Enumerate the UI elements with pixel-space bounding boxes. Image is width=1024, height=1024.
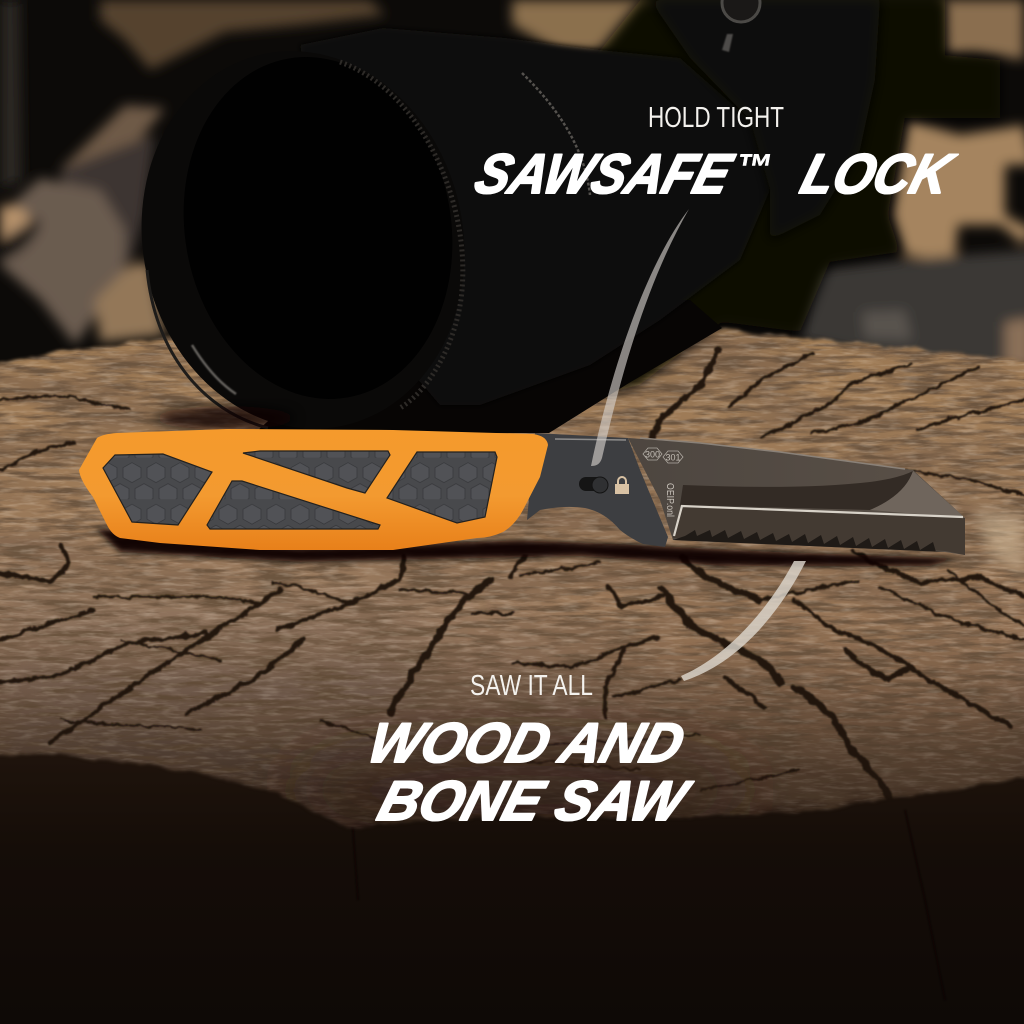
shadow under knife (95, 528, 960, 566)
spotting scope (107, 0, 1000, 459)
heading: SAWSAFE LOCK (468, 143, 962, 206)
blade marking: 300: 300 (645, 450, 660, 460)
heading: SAWSAFE LOCK: SAWSAFE (468, 143, 740, 206)
bright end patch (975, 510, 1024, 575)
textured ring edge (340, 62, 463, 408)
bolster top highlight (555, 439, 626, 440)
heading: SAWSAFE LOCK: ™ (732, 146, 775, 187)
saw section (673, 506, 965, 555)
light grain (0, 320, 1024, 840)
base colour (0, 320, 1024, 840)
bolster (527, 433, 668, 547)
lower fade (0, 661, 1024, 829)
lock slider slot (579, 477, 607, 491)
stump front cracks (347, 790, 945, 1000)
orange handle (79, 429, 548, 550)
stump front side (0, 730, 1024, 1024)
tip bevel (870, 471, 965, 518)
lower ring edge (147, 270, 268, 428)
lock slider button (592, 477, 608, 493)
camouflage fabric background (0, 0, 1024, 370)
tree stump (0, 326, 1024, 870)
engraved band (522, 73, 590, 195)
wood blotches (0, 320, 1024, 840)
blade body (628, 438, 965, 555)
saw teeth (673, 530, 945, 552)
blade marking: 300 (643, 448, 662, 460)
scope tube (300, 28, 770, 405)
eyepiece knob (722, 0, 760, 22)
heading: WOOD AND BONE SAW: BONE SAW (371, 770, 697, 833)
dark fuller grind (680, 471, 913, 510)
dark patch behind lower heading (290, 745, 750, 835)
knife (79, 429, 965, 555)
callout line: saw (681, 561, 806, 681)
blade marking: 301 (663, 451, 683, 463)
objective lens ring (107, 21, 499, 459)
grip panel: butt (103, 454, 212, 525)
grip panel: front (387, 452, 497, 523)
warm tint right side (714, 720, 978, 746)
objective lens opening (157, 36, 479, 420)
dark area between scope and stump (255, 300, 722, 433)
cracks in wood (0, 350, 1024, 827)
shadow under scope (155, 406, 295, 430)
scope eyepiece (650, 0, 880, 240)
saw edge highlight line (674, 506, 963, 536)
blade marking: 301: 301 (665, 452, 681, 462)
blade marking: steel: OEIP.onl (664, 483, 675, 517)
label: HOLD TIGHT: HOLD TIGHT (648, 102, 784, 134)
heading: WOOD AND BONE SAW (361, 712, 697, 833)
cool tint left side (0, 600, 420, 790)
handle body (79, 429, 548, 550)
heading: WOOD AND BONE SAW: WOOD AND (361, 712, 691, 775)
blade (628, 438, 965, 555)
knob reflection (722, 34, 733, 52)
wood grain (0, 320, 1024, 840)
padlock icon (615, 477, 629, 494)
callout line: lock (591, 209, 689, 466)
grip panel: lower middle (207, 481, 380, 529)
grip panel: upper middle (243, 451, 390, 493)
bolster body (527, 433, 668, 547)
blade spine highlight (640, 438, 905, 469)
soft black shadow around scope (400, 0, 1000, 420)
heading: SAWSAFE LOCK: LOCK (794, 143, 962, 206)
ring highlight (192, 345, 236, 394)
stump top surface (0, 320, 1024, 840)
label: SAW IT ALL: SAW IT ALL (470, 670, 593, 702)
